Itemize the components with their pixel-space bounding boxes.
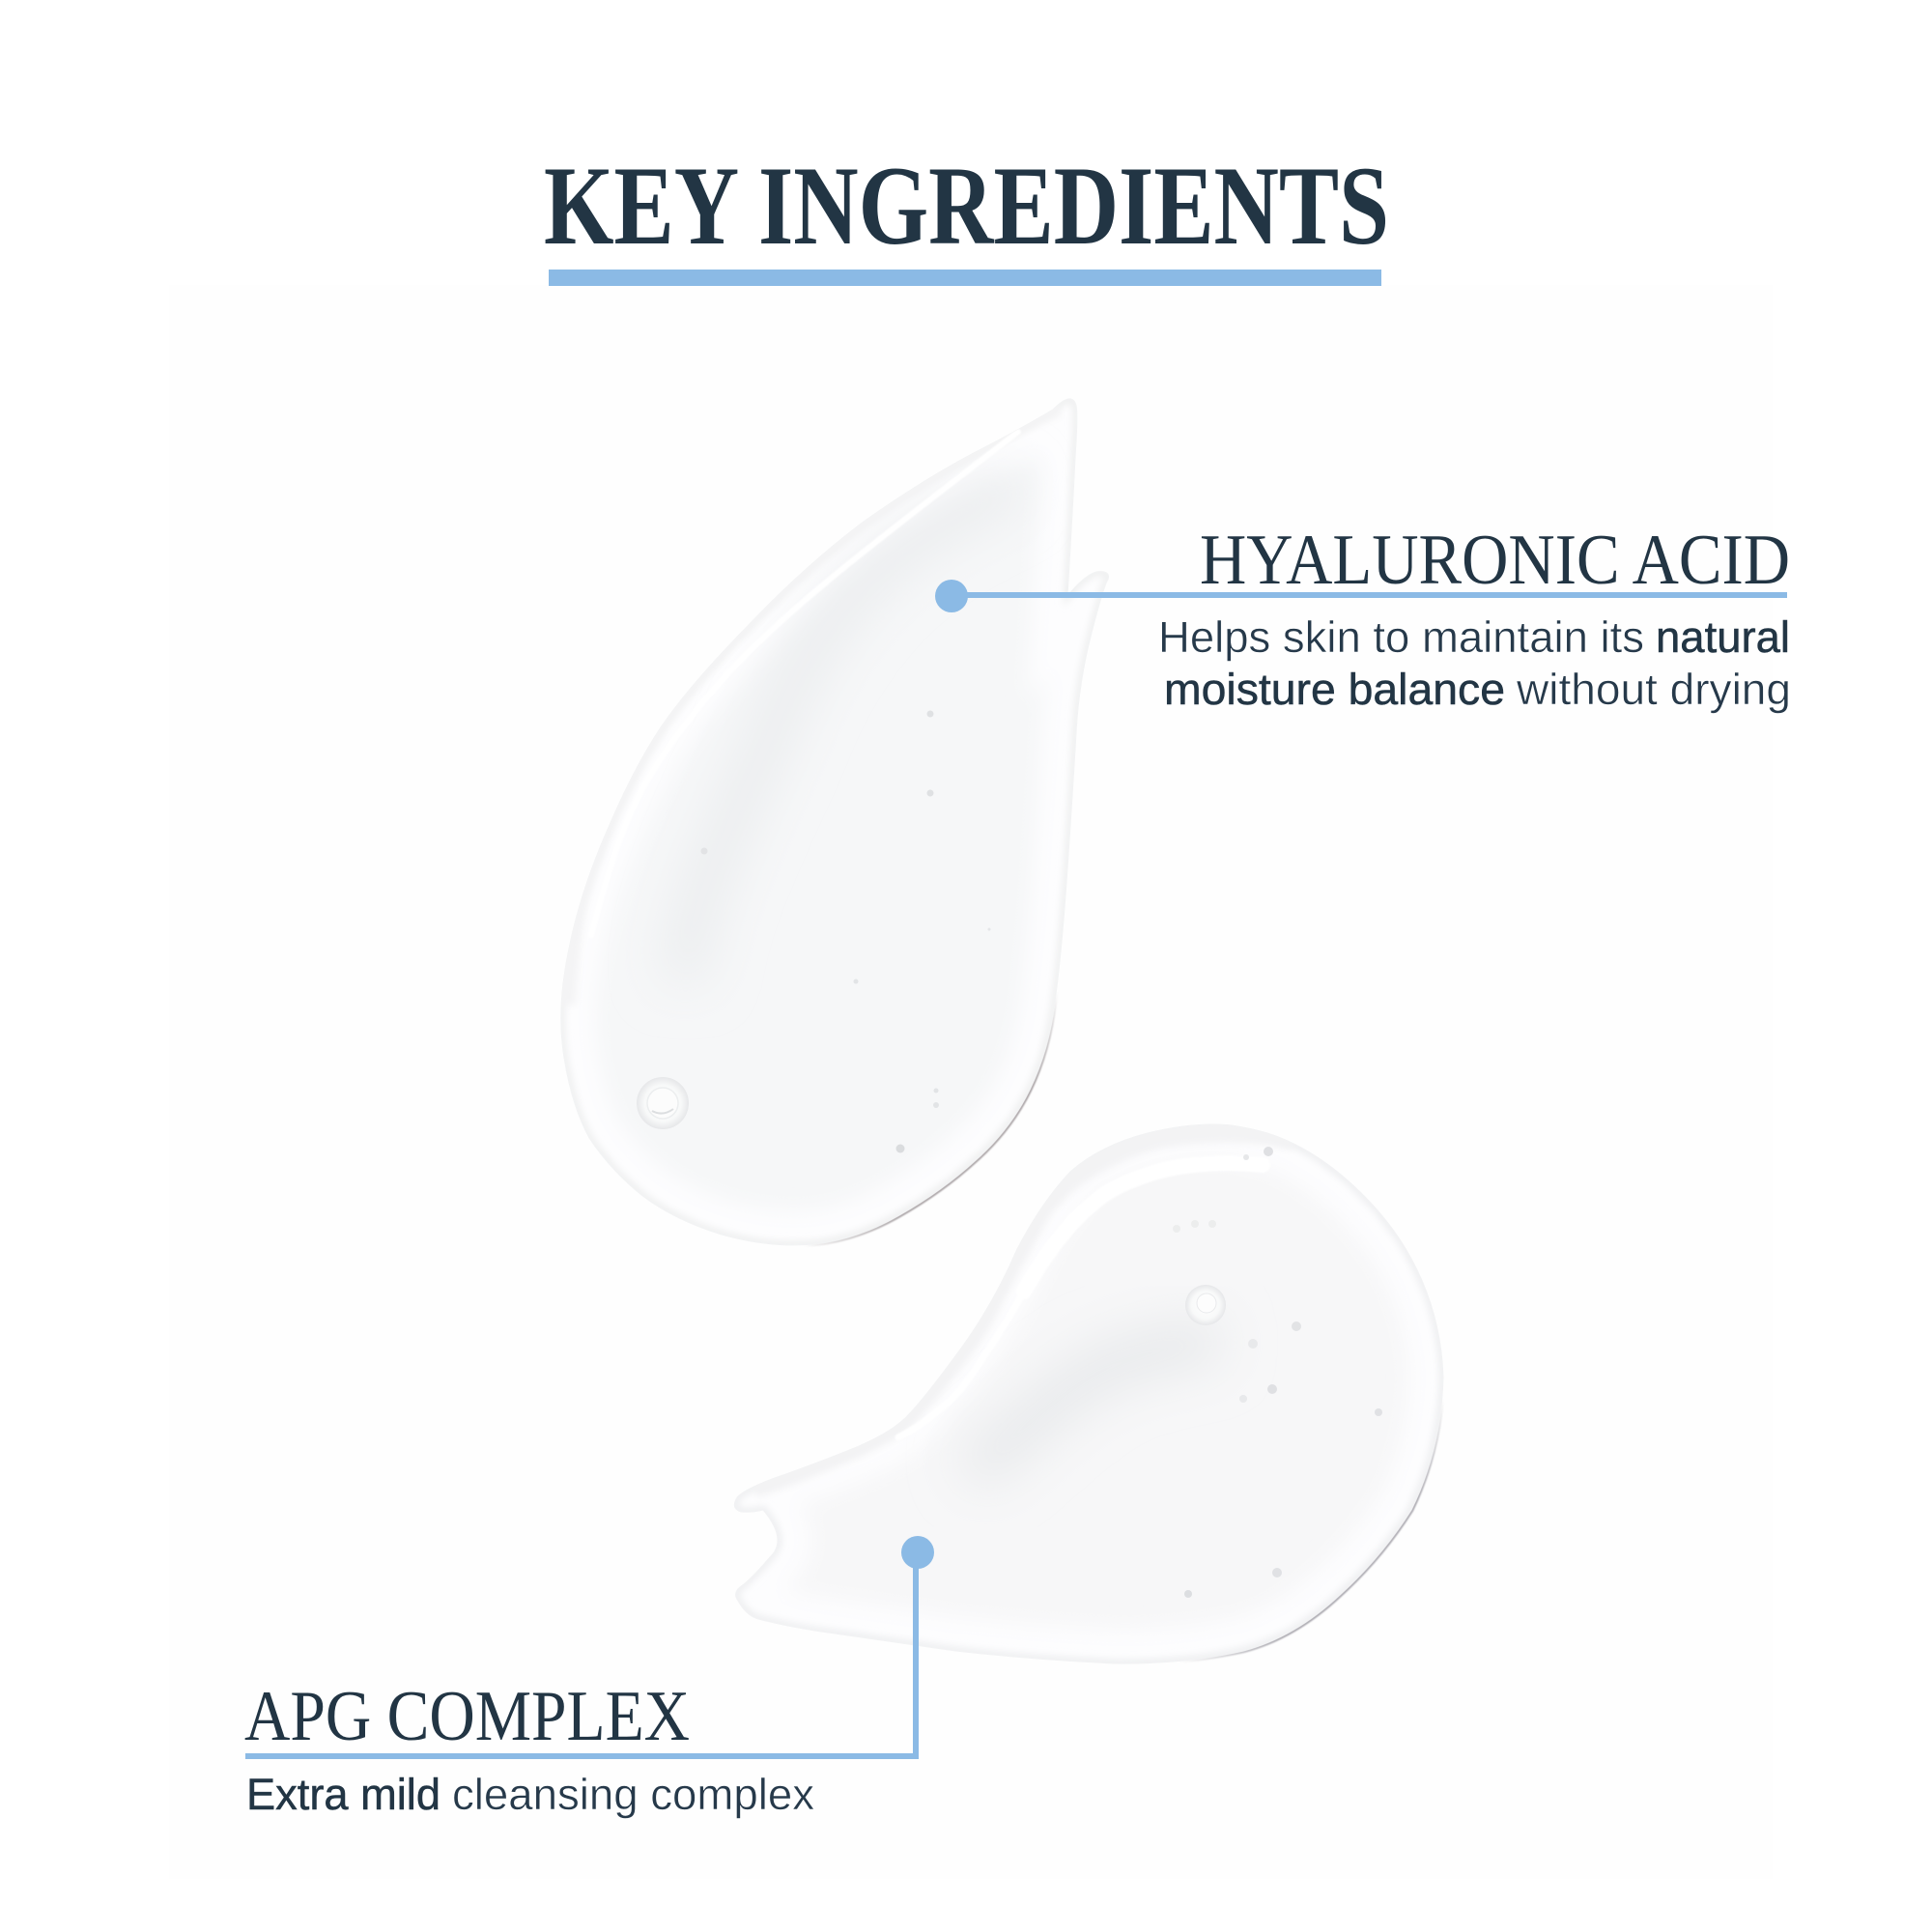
callout: apg complex xyxy=(244,1536,934,1819)
callout dot xyxy=(935,580,968,612)
callout heading: HYALURONIC ACID xyxy=(1200,521,1790,600)
cream swatch: lower drop xyxy=(734,1124,1444,1664)
callout heading: APG COMPLEX xyxy=(244,1677,690,1756)
callout leader line xyxy=(956,592,1787,598)
title underline xyxy=(549,270,1381,286)
bubble xyxy=(637,1077,689,1129)
gloss highlight xyxy=(1024,1163,1263,1292)
callout description: without drying xyxy=(1516,665,1791,714)
callout description: Helps skin to maintain its xyxy=(1158,612,1644,662)
callout description: Extra mild xyxy=(246,1770,440,1819)
gloss highlight xyxy=(808,429,1020,600)
heading: key ingredients: KEY INGREDIENTS xyxy=(544,144,1389,269)
translucent glossy band xyxy=(565,406,1058,1005)
callout leader line xyxy=(245,1552,916,1756)
callout description: natural xyxy=(1656,612,1790,662)
callout description: cleansing complex xyxy=(452,1770,814,1819)
title xyxy=(544,144,1389,286)
bubble xyxy=(1185,1285,1226,1325)
translucent glossy band xyxy=(1057,1132,1259,1203)
callout: hyaluronic acid xyxy=(935,521,1803,714)
callout description: moisture balance xyxy=(1164,665,1505,714)
callout dot xyxy=(901,1536,934,1569)
cream swatch: upper drop xyxy=(561,399,1109,1246)
